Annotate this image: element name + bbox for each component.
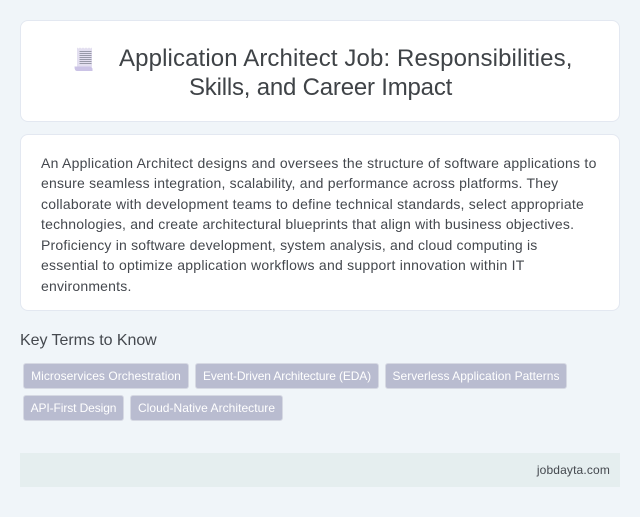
summary text	[41, 155, 597, 294]
footer source: jobdayta.com	[537, 463, 610, 477]
tag	[23, 395, 124, 421]
summary text: Proficiency in software development, system analysis, and cloud computing is	[41, 237, 538, 253]
summary text: An Application Architect designs and oversees the structure of software applications to	[41, 155, 597, 171]
summary text: ensure seamless integration, scalability, and performance across platforms. They	[41, 175, 558, 191]
tag: Microservices Orchestration	[31, 369, 181, 383]
tag	[195, 363, 379, 389]
summary text: essential to optimize application workflows and support innovation within IT	[41, 257, 525, 273]
tag: Serverless Application Patterns	[392, 369, 560, 383]
panel: summary card	[20, 134, 620, 311]
icon: document scroll	[74, 48, 92, 71]
panel: footer	[20, 453, 620, 487]
title: Skills, and Career Impact	[189, 74, 452, 101]
title	[119, 45, 573, 101]
heading: key terms: Key Terms to Know	[20, 332, 157, 349]
tag: API-First Design	[31, 401, 116, 415]
summary text: collaborate with development teams to define technical standards, select appropriate	[41, 196, 584, 212]
title: Application Architect Job: Responsibilities,	[119, 45, 573, 72]
tag	[23, 363, 189, 389]
panel: header card	[20, 20, 620, 122]
tag	[385, 363, 567, 389]
tag: Cloud-Native Architecture	[138, 401, 275, 415]
summary text: environments.	[41, 278, 132, 294]
tag	[130, 395, 283, 421]
summary text: technologies, and create architectural blueprints that align with business objectives.	[41, 216, 574, 232]
tag: Event-Driven Architecture (EDA)	[203, 369, 371, 383]
